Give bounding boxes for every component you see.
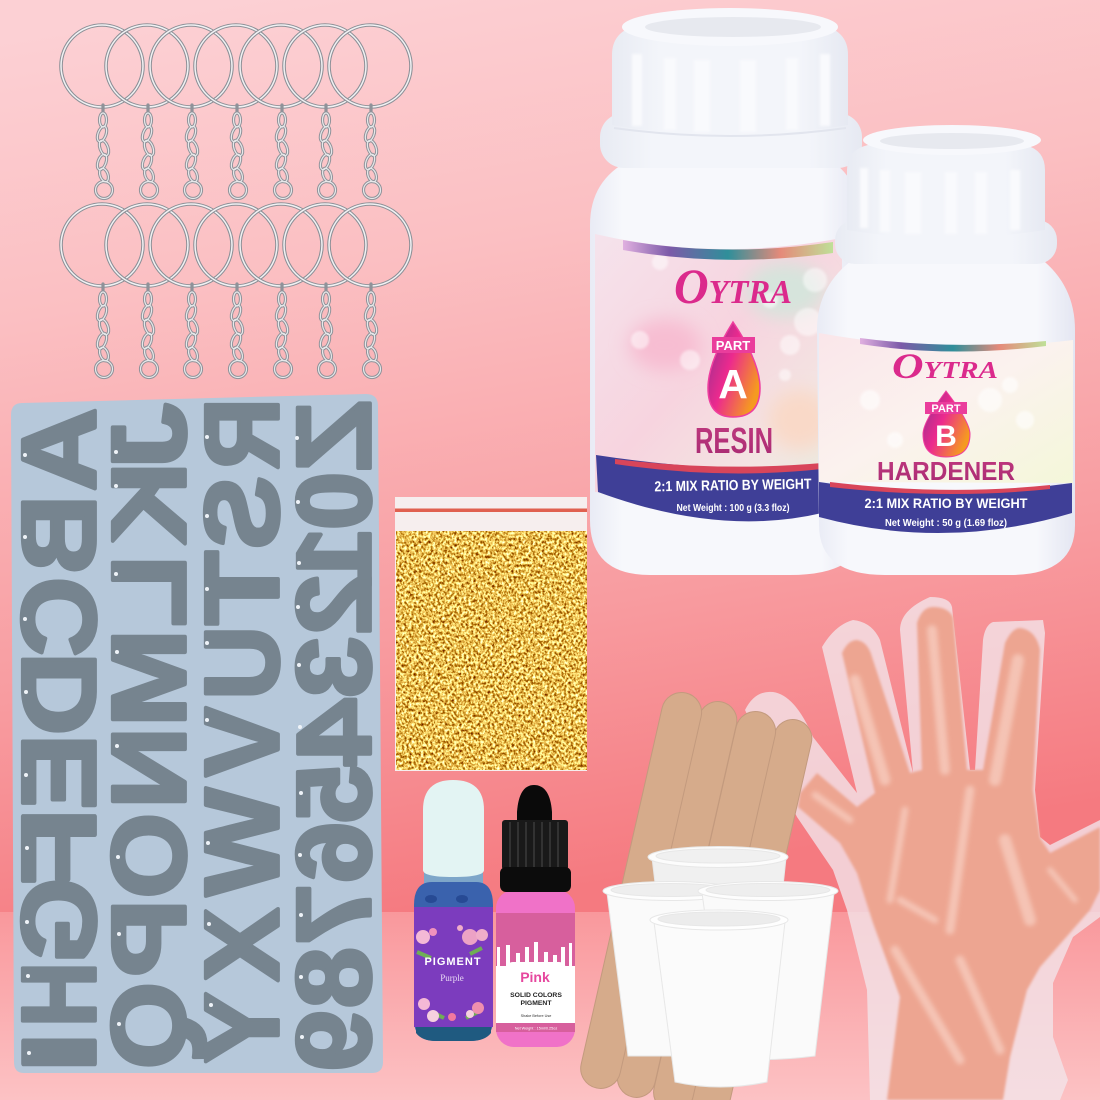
hand skin	[798, 607, 1100, 1100]
mold column 1 letters: F	[0, 808, 118, 885]
mold column 1 letters: H	[1, 962, 117, 1027]
mold column 2 letters: J	[91, 403, 207, 469]
pink pigment bottle: PIGMENT	[521, 1000, 552, 1007]
background floor	[0, 912, 1100, 1100]
label watercolor blobs	[629, 262, 832, 450]
mold column 1 letters: G	[1, 878, 117, 964]
mold column 4 numbers: 4	[276, 698, 392, 765]
mold column 2 letters: Q	[91, 982, 207, 1069]
front cup	[650, 910, 788, 1087]
key rings row 1	[61, 25, 411, 198]
mold column 1 letters: I	[1, 1031, 117, 1074]
mold column 4 numbers: 8	[276, 947, 392, 1008]
mold column 3 letters: V	[184, 707, 301, 777]
mold column 4 numbers	[276, 400, 393, 1071]
hardener jar part B	[817, 125, 1075, 575]
mold column 4 numbers: Z	[277, 400, 393, 471]
right cup	[698, 882, 838, 1060]
hardener blue band	[819, 482, 1072, 533]
resin label: RESIN	[695, 420, 773, 461]
mold column 2 letters: L	[90, 555, 208, 627]
mold column 4 numbers: 2	[276, 574, 392, 635]
hardener logo: OYTRA	[892, 346, 998, 386]
pink pigment bottle: Net Weight : 15ml/0.25oz	[515, 1026, 557, 1030]
mold column 3 letters: X	[184, 908, 300, 981]
hardener label: HARDENER	[877, 456, 1015, 486]
part A drop: PART	[716, 338, 750, 353]
mold column 1 letters	[0, 408, 118, 1074]
resin label: Net Weight : 100 g (3.3 floz)	[676, 502, 790, 514]
purple pigment bottle: PIGMENT	[424, 956, 482, 968]
mold column 1 letters: D	[1, 652, 118, 735]
mold column 2 letters: M	[90, 629, 208, 727]
mold column 4 numbers: 1	[276, 527, 392, 588]
silicone alphabet mold	[0, 394, 393, 1074]
mold column 1 letters: B	[1, 495, 117, 574]
hardener colour strip	[860, 338, 1046, 352]
plastic glove with hand	[745, 597, 1100, 1100]
hardener watercolor bubbles	[860, 377, 1034, 448]
back cup	[648, 846, 788, 990]
mold keyring holes	[23, 435, 304, 1055]
pink pigment bottle: Shake Before Use	[521, 1014, 551, 1018]
mold column 1 letters: C	[1, 577, 117, 656]
pink pigment bottle	[496, 785, 575, 1047]
mold column 3 letters: S	[184, 476, 300, 549]
mold column 2 letters: P	[92, 899, 208, 977]
mold column 3 letters: R	[184, 398, 301, 469]
mold column 2 letters: K	[92, 462, 208, 545]
mold column 1 letters: E	[1, 734, 118, 810]
part B drop: PART	[931, 403, 961, 415]
purple pigment bottle: Purple	[440, 973, 464, 983]
mold column 4 numbers: 5	[276, 764, 393, 823]
mold column 3 letters: W	[185, 788, 301, 897]
mold column 3 letters: T	[184, 551, 300, 625]
mold column 2 letters: O	[91, 813, 207, 899]
wooden stir sticks	[577, 689, 816, 1100]
resin jar part A	[590, 8, 862, 575]
flower wreath	[416, 925, 488, 1022]
part B drop	[923, 391, 970, 457]
mold column 3 letters: U	[183, 626, 300, 700]
label top colour strip	[623, 240, 833, 260]
resin label	[595, 234, 842, 521]
glove wrinkles	[815, 630, 1075, 1060]
left cup	[603, 882, 737, 1056]
mold column 2 letters	[90, 403, 208, 1069]
resin logo: OYTRA	[674, 258, 792, 314]
mold column 1 letters: A	[1, 408, 118, 491]
mold column 3 letters	[183, 398, 301, 1063]
part A drop: A	[718, 361, 748, 407]
mold column 4 numbers: 7	[276, 884, 392, 945]
resin jar cap	[600, 8, 862, 168]
mold column 3 letters: Y	[184, 992, 301, 1063]
pink pigment bottle: SOLID COLORS	[510, 992, 562, 999]
paper cups	[603, 846, 838, 1087]
hardener label: Net Weight : 50 g (1.69 floz)	[885, 517, 1007, 529]
part B drop: B	[935, 420, 957, 453]
hardener label	[819, 333, 1073, 533]
gold foil flakes bag	[395, 497, 587, 771]
mold column 4 numbers: 6	[276, 822, 392, 883]
resin blue band	[596, 455, 822, 521]
resin label: 2:1 MIX RATIO BY WEIGHT	[654, 477, 812, 495]
hardener jar cap	[835, 125, 1057, 264]
pink pigment bottle: Pink	[520, 969, 550, 985]
part A drop	[708, 322, 760, 417]
mold column 2 letters: N	[91, 727, 208, 809]
mold column 4 numbers: 3	[276, 637, 392, 698]
hardener label: 2:1 MIX RATIO BY WEIGHT	[864, 495, 1028, 511]
purple pigment bottle	[414, 780, 493, 1041]
mold column 4 numbers: 9	[276, 1010, 392, 1071]
glove film	[745, 597, 1100, 1100]
label watercolor bubbles	[631, 254, 827, 381]
key rings row 2	[61, 204, 411, 378]
mold column 4 numbers: 0	[276, 472, 393, 530]
